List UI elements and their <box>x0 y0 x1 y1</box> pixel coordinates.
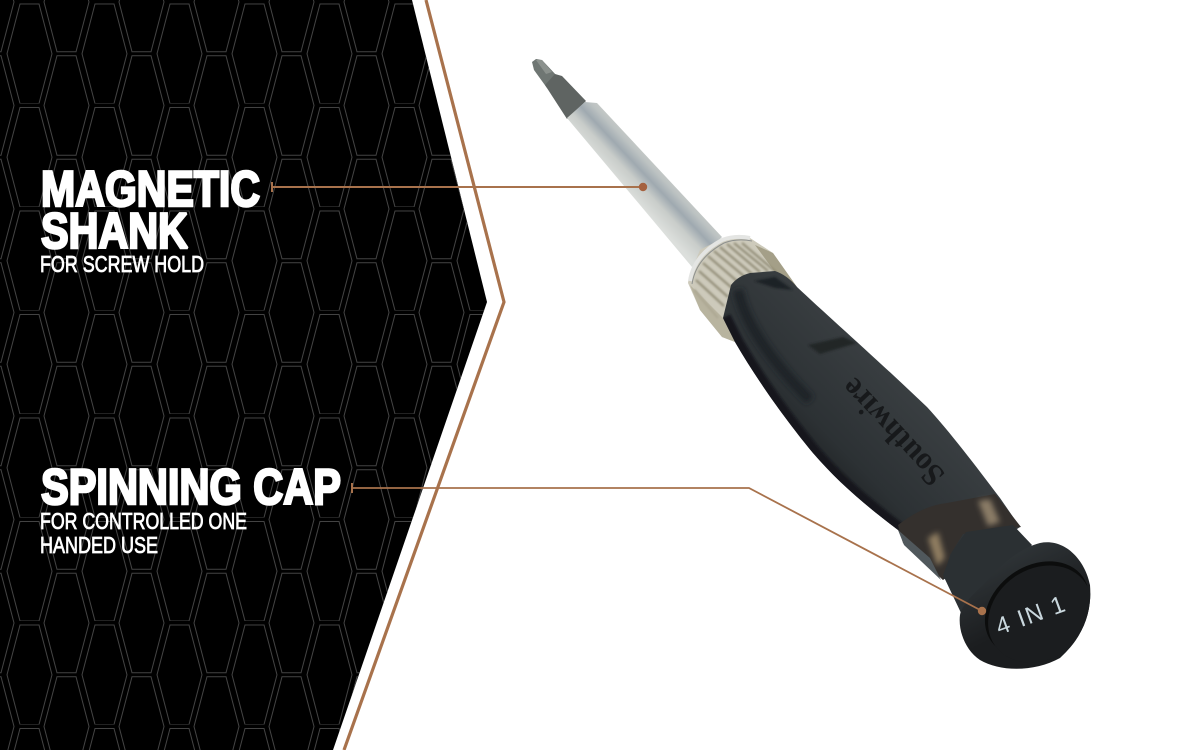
subheading: handed use: HANDED USE <box>40 532 158 558</box>
chrome band <box>898 494 1021 580</box>
brand text: Southwire: Southwire <box>833 371 951 494</box>
product: 4-in-1 screwdriver <box>532 59 1111 682</box>
subheading: for controlled one: FOR CONTROLLED ONE <box>40 508 247 534</box>
text block: magnetic shank <box>40 161 260 277</box>
callout: magnetic shank leader line <box>272 182 647 192</box>
background panel: black chevron with hexagon pattern <box>0 0 487 750</box>
cap body <box>960 542 1090 669</box>
rubber handle <box>723 271 1020 580</box>
chevron outline: brown line <box>344 0 504 750</box>
heading: magnetic: MAGNETIC <box>41 161 260 217</box>
heading: shank: SHANK <box>41 203 188 259</box>
magnetic shank <box>567 102 722 267</box>
knurled collar <box>688 236 797 342</box>
subheading: for screw hold: FOR SCREW HOLD <box>40 251 204 277</box>
cap face <box>985 561 1090 648</box>
spinning cap <box>944 525 1090 669</box>
heading: spinning cap: SPINNING CAP <box>41 459 341 515</box>
cap neck <box>943 525 1032 615</box>
text block: spinning cap <box>40 459 341 558</box>
callout: spinning cap leader line <box>352 483 986 615</box>
screwdriver bit tip <box>532 59 586 119</box>
cap label: 4 IN 1: 4 IN 1 <box>992 590 1070 641</box>
